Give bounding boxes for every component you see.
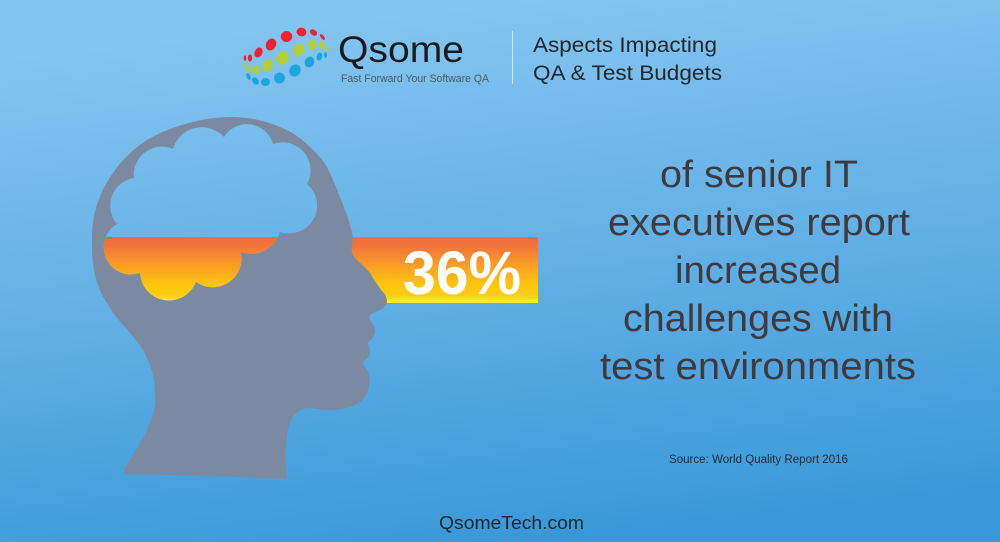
logo icon: coloured dots (243, 27, 328, 86)
statement text: of senior IT (660, 154, 858, 196)
heading: Aspects Impacting (533, 34, 717, 57)
brain fill level (104, 237, 278, 300)
statement text: increased (675, 250, 841, 292)
logo wordmark: Qsome (338, 29, 464, 70)
statement text: challenges with (623, 298, 893, 340)
heading (533, 34, 722, 85)
statement text (600, 154, 916, 388)
header divider (512, 31, 513, 84)
statement text: test environments (600, 346, 916, 388)
heading: QA & Test Budgets (533, 62, 722, 85)
stat: 36%: 36% (403, 239, 521, 307)
logo: Qsome (243, 27, 490, 86)
head silhouette (92, 117, 387, 479)
footer website: QsomeTech.com (439, 513, 584, 533)
percentage bar (340, 237, 538, 303)
statement text: executives report (608, 202, 910, 244)
source note: Source: World Quality Report 2016 (669, 454, 848, 466)
logo tagline: Fast Forward Your Software QA (341, 73, 490, 85)
brain cloud (104, 124, 317, 301)
